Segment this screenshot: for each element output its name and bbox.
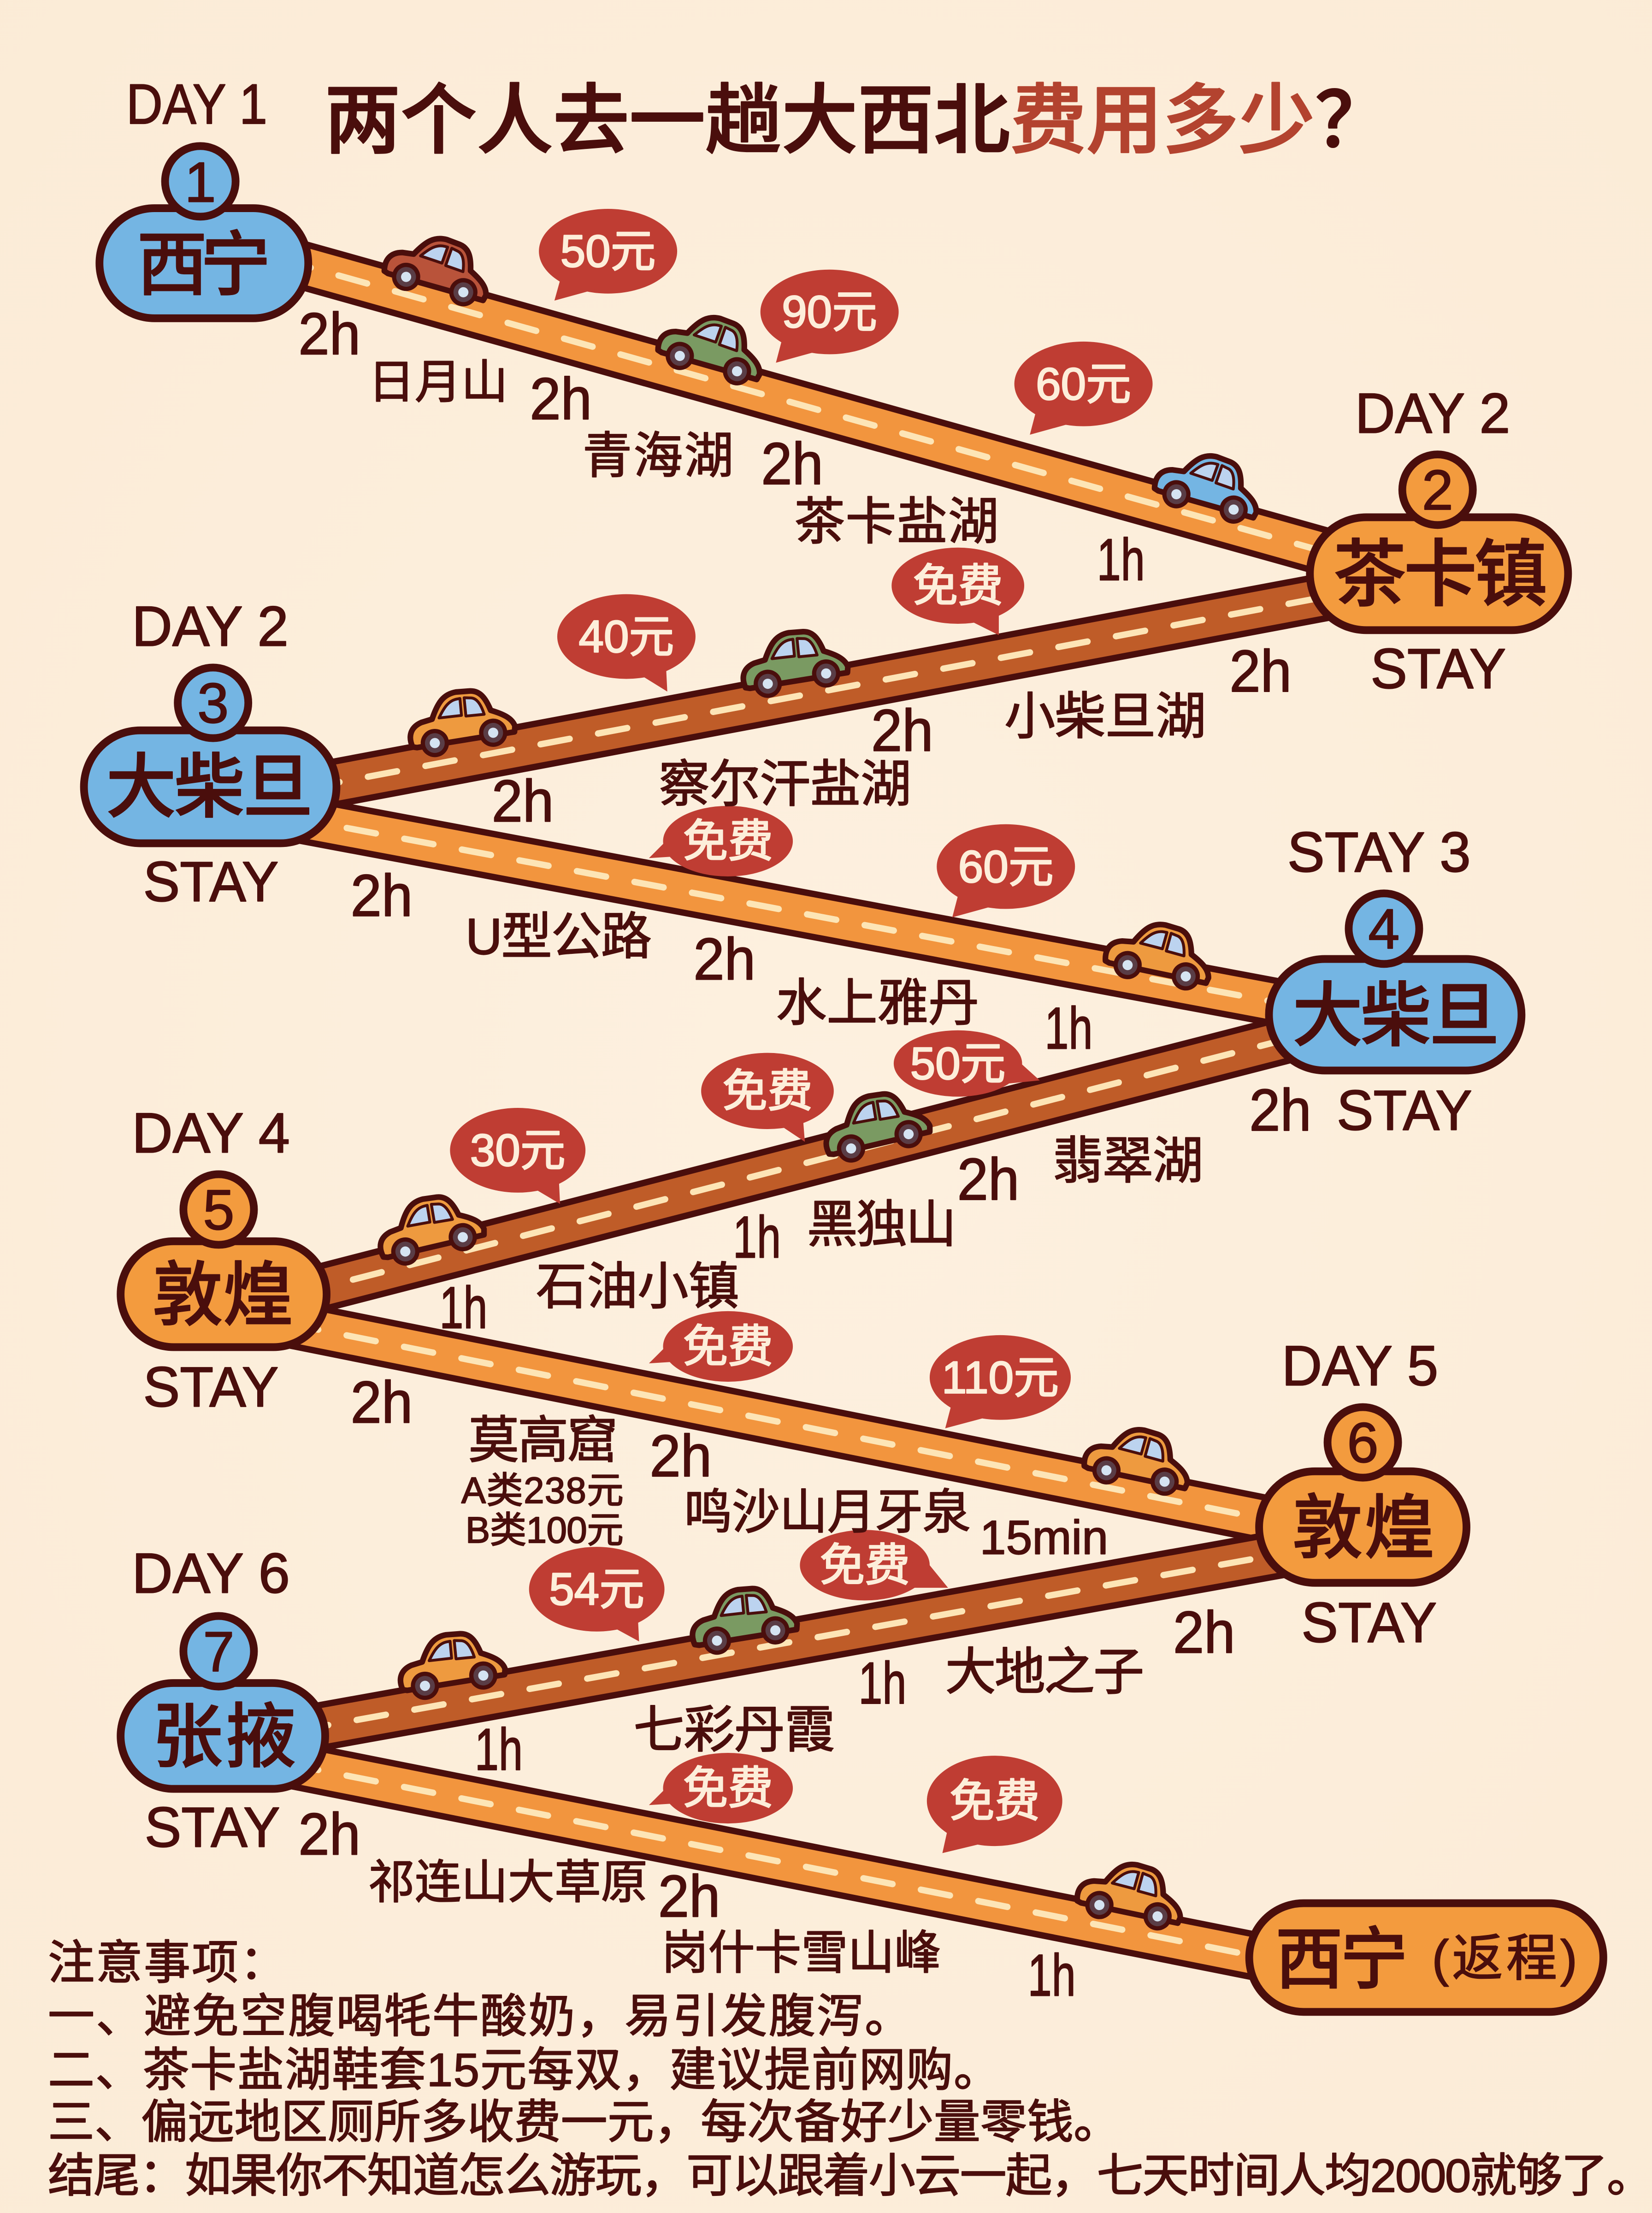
stop 3: 大柴旦: 3 [197, 671, 229, 734]
day and stay labels: STAY 3 [1287, 820, 1471, 883]
drive time labels: 1h [1097, 527, 1145, 593]
attraction labels: 茶卡盐湖 [794, 493, 999, 550]
cost bubble: 免费: 免费 [722, 1065, 813, 1116]
drive time labels: 1h [733, 1205, 781, 1271]
cost bubble: 免费: 免费 [950, 1775, 1040, 1826]
road: 大柴旦 to 大柴旦 [289, 817, 1305, 1008]
cost bubble: 免费: 免费 [683, 816, 773, 866]
stop 1: 西宁 [100, 146, 308, 318]
drive time labels: 2h [351, 1370, 413, 1436]
stop 1: 西宁: 西宁 [137, 226, 271, 305]
drive time labels: 15min [980, 1511, 1108, 1564]
cost bubble: 110元: 110元 [942, 1352, 1059, 1402]
cost bubble: 30元: 30元 [470, 1125, 566, 1176]
cost bubble: 免费 [649, 1753, 793, 1823]
road: 张掖 to 敦煌 [299, 1550, 1305, 1730]
stop 1: 西宁: 1 [185, 151, 216, 214]
cost bubble: 60元: 60元 [1036, 358, 1131, 409]
drive time labels: 2h [1249, 1077, 1311, 1143]
car: green [737, 624, 850, 700]
attraction labels: 祁连山大草原 [368, 1857, 648, 1908]
car: orange [372, 1187, 488, 1269]
car: orange [394, 1626, 507, 1702]
drive time labels: 2h [658, 1864, 720, 1929]
road: 敦煌 to 大柴旦 [296, 1035, 1305, 1294]
attraction labels: A类238元 [461, 1470, 624, 1511]
cost bubble: 40元: 40元 [578, 611, 674, 662]
stop 5: 敦煌 [121, 1174, 327, 1347]
cost bubble: 90元: 90元 [782, 286, 877, 337]
notes heading: 注意事项： [48, 1937, 286, 1989]
drive time labels: 1h [1028, 1943, 1076, 2009]
cost bubble: 免费 [891, 548, 1024, 635]
stop 7: 张掖 [121, 1616, 325, 1789]
road: 敦煌 to 敦煌 [289, 1324, 1291, 1524]
car: green [654, 305, 771, 389]
drive time labels: 1h [475, 1717, 523, 1783]
cost bubble: 免费 [701, 1053, 834, 1142]
drive time labels: 2h [649, 1423, 712, 1489]
stop 8: 西宁 return [1249, 1903, 1603, 2012]
day and stay labels: STAY [143, 850, 278, 913]
cost bubble: 110元 [930, 1335, 1071, 1428]
day and stay labels: DAY 2 [1355, 381, 1510, 444]
stop 5: 敦煌: 敦煌 [153, 1256, 294, 1335]
attraction labels: 日月山 [368, 356, 508, 408]
attraction labels [368, 356, 1206, 1979]
note one: 一、避免空腹喝牦牛酸奶，易引发腹泻。 [48, 1991, 911, 2042]
cost bubble: 30元 [450, 1108, 585, 1204]
car: blue [1150, 443, 1268, 527]
day and stay labels: STAY [145, 1796, 280, 1859]
stop 8: 西宁 return: (返程) [1432, 1930, 1577, 1987]
day and stay labels [126, 72, 1510, 1859]
cost bubble: 60元 [1015, 342, 1153, 435]
day and stay labels: STAY [1370, 637, 1506, 700]
cost bubble: 90元 [761, 270, 899, 363]
stop 3: 大柴旦 [84, 668, 336, 843]
attraction labels: 莫高窟 [468, 1412, 618, 1469]
note two: 二、茶卡盐湖鞋套15元每双，建议提前网购。 [48, 2044, 1000, 2096]
note three: 三、偏远地区厕所多收费一元，每次备好少量零钱。 [48, 2097, 1120, 2148]
attraction labels: 黑独山 [807, 1196, 956, 1253]
drive time labels: 2h [351, 863, 413, 929]
cost bubble: 免费: 免费 [683, 1763, 773, 1813]
day and stay labels: DAY 4 [132, 1101, 290, 1164]
drive time labels: 2h [1229, 639, 1292, 704]
stop 2: 茶卡镇: 茶卡镇 [1333, 533, 1548, 615]
drive time labels: 2h [693, 926, 755, 992]
stop 6: 敦煌: 6 [1347, 1411, 1379, 1474]
car: red [380, 226, 497, 310]
drive time labels [298, 301, 1311, 2009]
drive time labels: 2h [298, 301, 360, 367]
drive time labels: 2h [871, 698, 933, 764]
cost bubble: 50元: 50元 [560, 226, 656, 277]
attraction labels: 大地之子 [945, 1644, 1144, 1700]
cost bubble: 免费 [649, 806, 793, 876]
drive time labels: 1h [858, 1651, 906, 1716]
title: 两个人去一趟大西北费用多少？ [324, 78, 1391, 163]
attraction labels: 岗什卡雪山峰 [661, 1927, 941, 1979]
car: orange [1102, 915, 1217, 993]
cost bubble: 免费 [649, 1311, 793, 1382]
cost bubble: 60元: 60元 [958, 841, 1054, 892]
car: orange [1074, 1855, 1189, 1932]
stop 4: 大柴旦: 大柴旦 [1292, 976, 1499, 1055]
stop 5: 敦煌: 5 [203, 1178, 234, 1241]
stop 2: 茶卡镇: 2 [1422, 458, 1453, 521]
drive time labels: 1h [439, 1275, 487, 1341]
cost bubble: 54元: 54元 [549, 1564, 644, 1615]
drive time labels: 2h [1173, 1600, 1235, 1666]
day and stay labels: STAY [1337, 1078, 1472, 1142]
cost bubble: 54元 [529, 1547, 665, 1641]
attraction labels: 鸣沙山月牙泉 [684, 1485, 971, 1539]
car: green [817, 1083, 933, 1166]
day and stay labels: STAY [143, 1355, 278, 1419]
stop 6: 敦煌: 敦煌 [1292, 1489, 1435, 1568]
drive time labels: 2h [761, 431, 823, 497]
stop 3: 大柴旦: 大柴旦 [106, 748, 313, 827]
cost bubble: 50元 [894, 1030, 1040, 1097]
cost bubble: 免费: 免费 [820, 1540, 910, 1591]
day and stay labels: DAY 5 [1282, 1334, 1438, 1397]
cost bubble: 免费: 免费 [913, 560, 1003, 611]
drive time labels: 2h [298, 1801, 360, 1867]
attraction labels: 水上雅丹 [776, 975, 979, 1031]
drive time labels: 2h [957, 1147, 1019, 1213]
car: green [686, 1580, 800, 1657]
cost bubble: 60元 [937, 824, 1075, 917]
road: 西宁 to 茶卡镇 [282, 260, 1340, 556]
cost bubble: 免费 [800, 1530, 948, 1600]
stop 4: 大柴旦 [1269, 893, 1522, 1071]
stop 7: 张掖: 7 [203, 1620, 234, 1683]
stop 2: 茶卡镇 [1310, 455, 1568, 630]
cost bubble: 免费: 免费 [683, 1321, 773, 1372]
attraction labels: 七彩丹霞 [633, 1702, 835, 1758]
attraction labels: U型公路 [466, 908, 652, 965]
cost bubble: 50元: 50元 [910, 1038, 1006, 1089]
attraction labels: 翡翠湖 [1052, 1133, 1204, 1189]
cost bubble: 免费 [927, 1756, 1062, 1853]
day and stay labels: DAY 1 [126, 72, 267, 136]
drive time labels: 1h [1044, 995, 1092, 1061]
stop 7: 张掖: 张掖 [153, 1698, 296, 1776]
closing line: 结尾：如果你不知道怎么游玩，可以跟着小云一起，七天时间人均2000就够了。 [48, 2150, 1652, 2202]
cost bubble: 50元 [539, 209, 677, 301]
attraction labels: 小柴旦湖 [1004, 688, 1206, 745]
drive time labels: 2h [530, 366, 592, 432]
attraction labels: 青海湖 [583, 428, 734, 484]
notes block [48, 1937, 1652, 2202]
cost bubble: 40元 [557, 594, 696, 692]
drive time labels: 2h [492, 769, 554, 834]
attraction labels: B类100元 [466, 1509, 624, 1550]
day and stay labels: DAY 6 [132, 1542, 290, 1605]
car: orange [404, 683, 518, 759]
day and stay labels: STAY [1301, 1591, 1437, 1654]
stop 8: 西宁 return: 西宁 [1275, 1922, 1408, 1998]
stop 6: 敦煌 [1259, 1407, 1467, 1583]
attraction labels: 察尔汗盐湖 [659, 756, 911, 813]
road: 大柴旦 to 茶卡镇 [310, 593, 1347, 787]
day and stay labels: DAY 2 [132, 594, 289, 658]
car: orange [1081, 1420, 1196, 1498]
attraction labels: 石油小镇 [536, 1259, 739, 1315]
road: 张掖 to 西宁 return [289, 1764, 1277, 1960]
stop 4: 大柴旦: 4 [1368, 897, 1400, 960]
